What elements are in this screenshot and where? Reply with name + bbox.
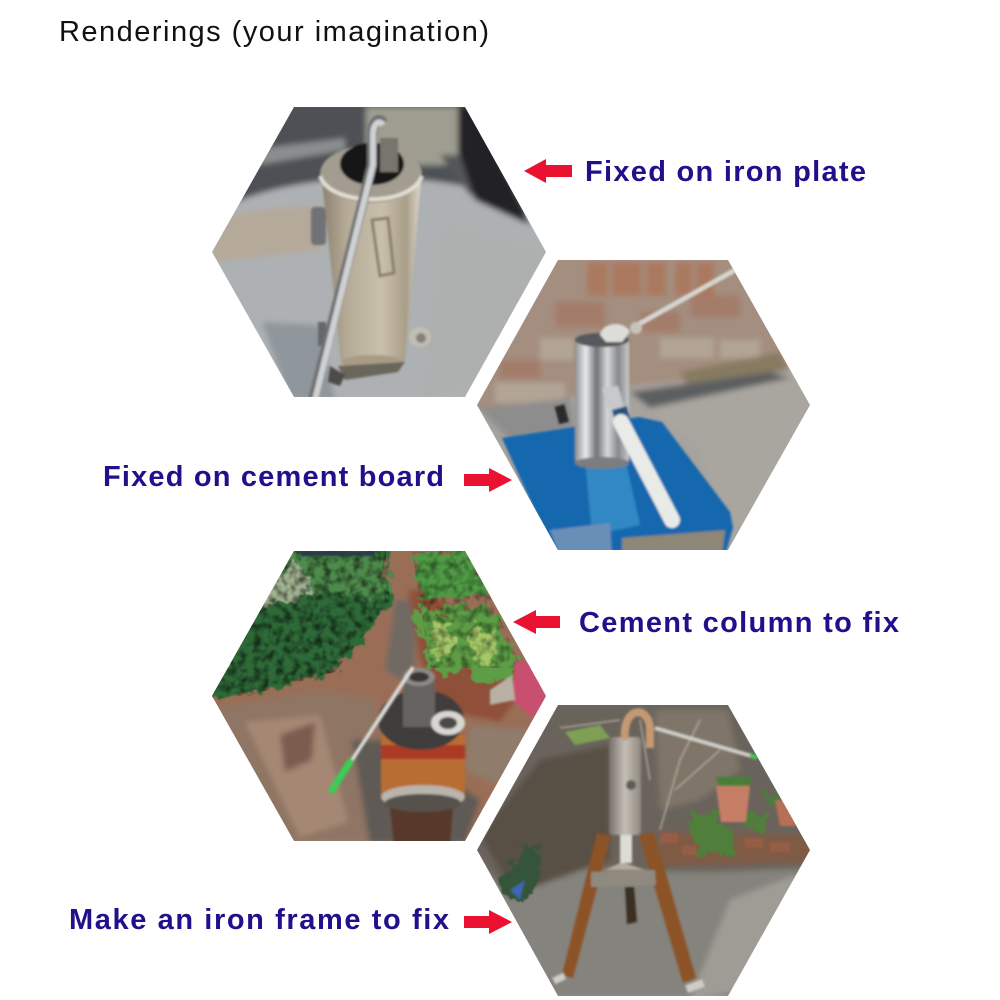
label: iron frame: Make an iron frame to fix — [69, 904, 449, 936]
photo: cement column in vegetable garden — [205, 545, 550, 845]
arrow: fixed on iron plate — [524, 159, 572, 183]
foliage texture — [205, 545, 390, 700]
photo: pump fixed on iron plate — [212, 107, 546, 397]
label: fixed on cement board: Fixed on cement board — [103, 461, 444, 493]
arrow: cement column — [513, 610, 560, 634]
arrow: fixed on cement board — [464, 468, 512, 492]
label: fixed on iron plate: Fixed on iron plate — [585, 156, 866, 188]
photo: pump fixed on cement board — [470, 255, 815, 555]
arrow: iron frame — [464, 910, 512, 934]
label: cement column: Cement column to fix — [579, 607, 899, 639]
photo: pump on iron frame — [470, 700, 815, 1000]
title: Renderings (your imagination) — [59, 16, 489, 48]
